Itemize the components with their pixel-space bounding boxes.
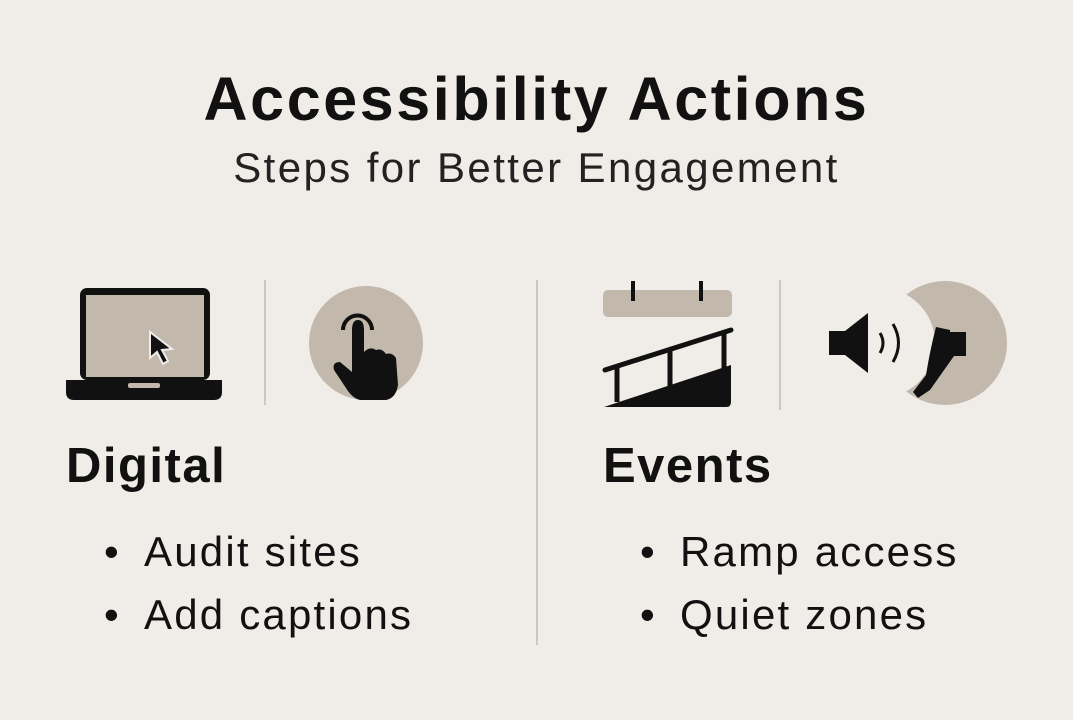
icon: laptop [66,288,222,400]
list: digital: • [104,591,121,638]
subtitle: Steps for Better Engagement [233,144,840,191]
icon: calendar ramp [603,281,732,407]
title: Accessibility Actions [204,65,869,133]
list: events: • [640,591,657,638]
icon: touch hand [309,286,423,400]
list: digital [104,528,413,638]
heading: Events: Events [603,439,773,493]
list: events [640,528,959,638]
heading: Digital: Digital [66,439,226,493]
icon: speaker and ear [825,281,1007,405]
list: digital: • [104,528,121,575]
list: events: • [640,528,657,575]
list: events: Quiet zones [680,591,928,638]
list: digital: Add captions [144,591,413,638]
list: digital: Audit sites [144,528,362,575]
list: events: Ramp access [680,528,959,575]
